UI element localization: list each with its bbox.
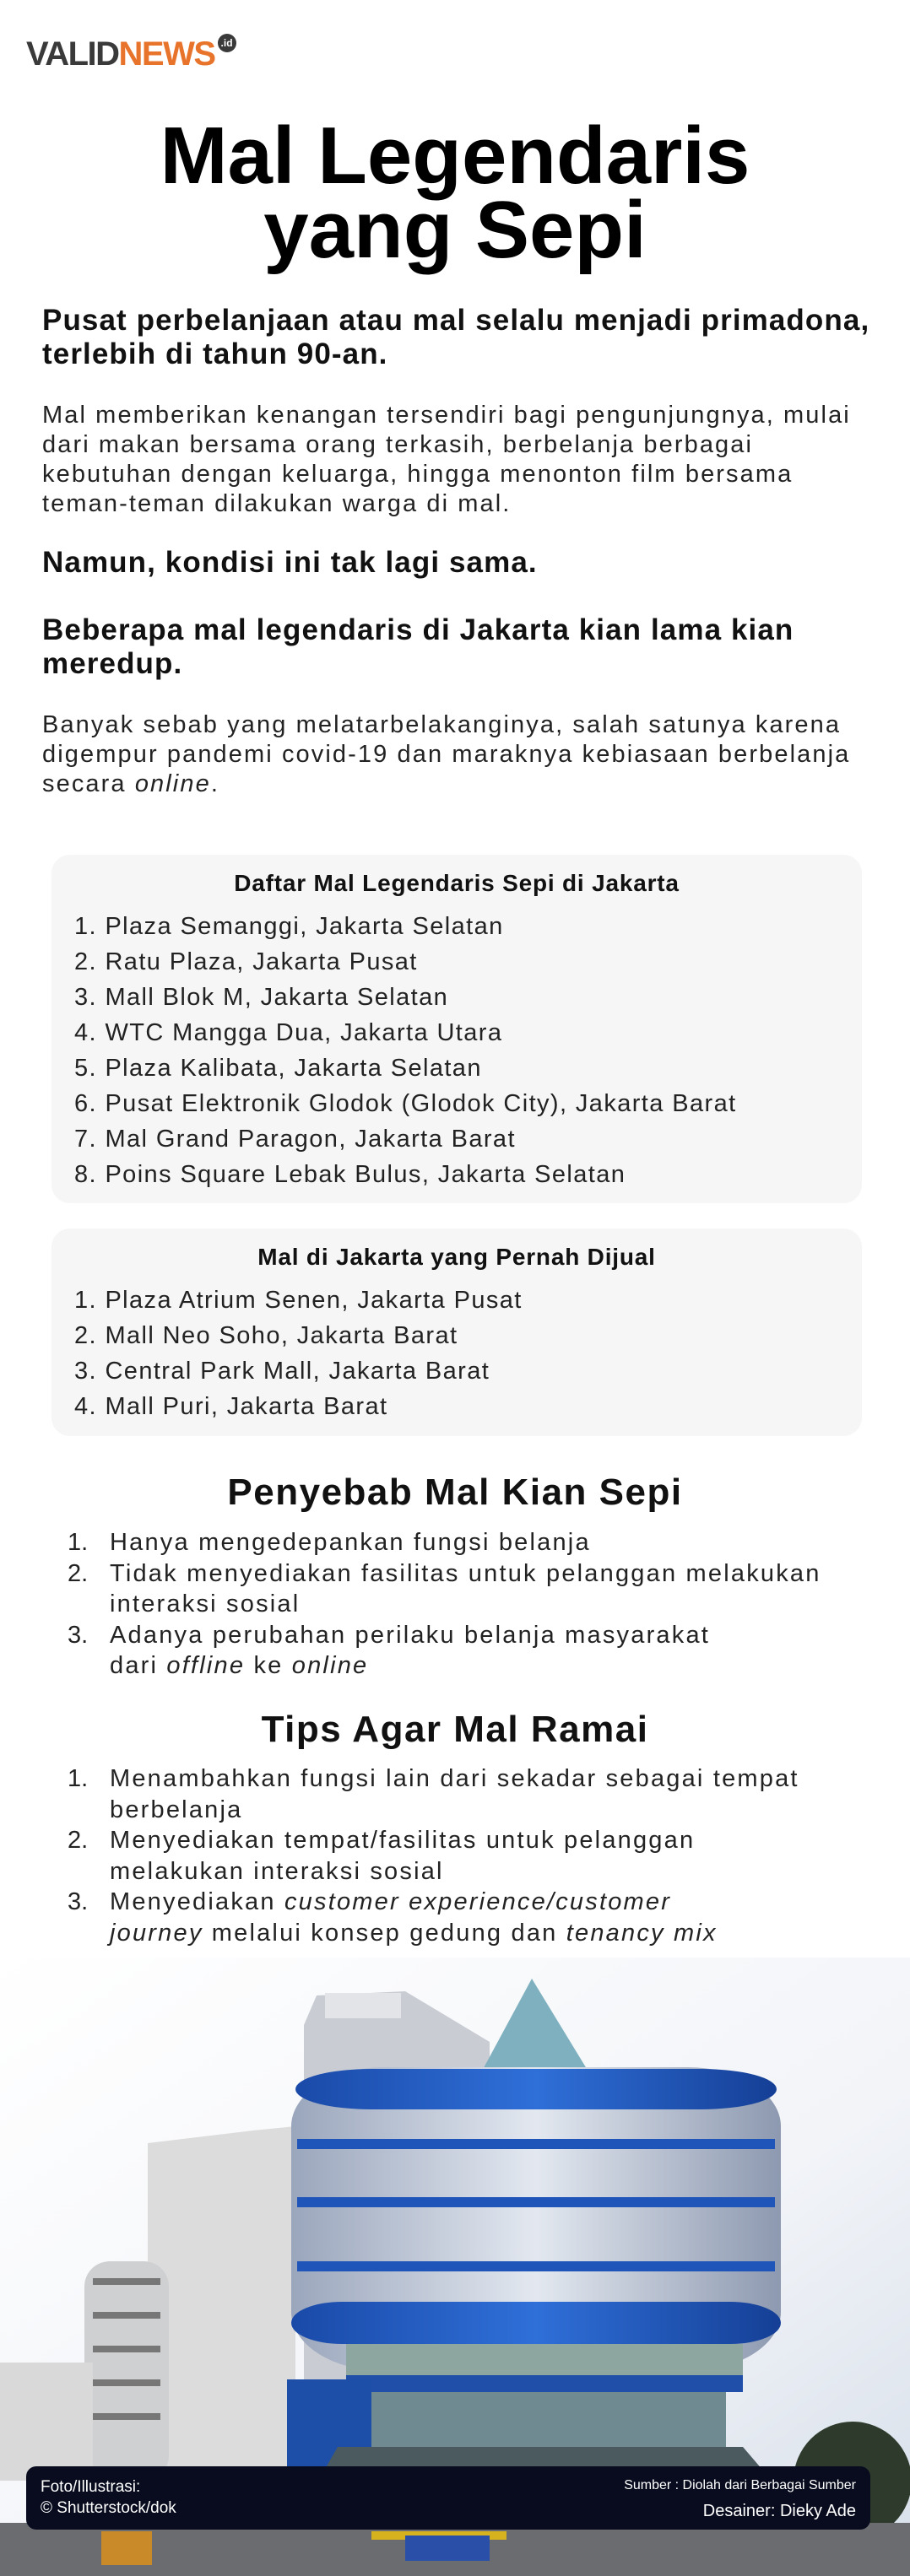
photo: mall building	[0, 1958, 910, 2576]
credit	[41, 2478, 176, 2517]
list: penyebab: interaksi sosial	[110, 1590, 300, 1617]
cone	[479, 1979, 591, 2076]
lead text: Pusat perbelanjaan atau mal selalu menjadi primadona,	[42, 304, 869, 337]
list: tips: 2.	[68, 1827, 88, 1854]
list: tips: 1.	[68, 1765, 88, 1792]
list: 2. Ratu Plaza, Jakarta Pusat	[74, 948, 418, 975]
list: tips: Menyediakan customer experience/customer	[110, 1888, 671, 1915]
title: yang Sepi	[263, 185, 647, 275]
heading: tips: Tips Agar Mal Ramai	[262, 1709, 648, 1750]
panel: daftar mal sepi	[51, 855, 862, 1203]
credit: © Shutterstock/dok	[41, 2499, 176, 2517]
list: 1. Plaza Atrium Senen, Jakarta Pusat	[74, 1287, 523, 1314]
list: 4. Mall Puri, Jakarta Barat	[74, 1393, 387, 1420]
title: Mal Legendaris	[160, 111, 750, 201]
list: 2. Mall Neo Soho, Jakarta Barat	[74, 1322, 458, 1349]
list: penyebab	[68, 1529, 821, 1679]
list: penyebab: 1.	[68, 1529, 88, 1556]
lead text: terlebih di tahun 90-an.	[42, 338, 388, 370]
list: tips: 3.	[68, 1888, 88, 1915]
list: penyebab: Hanya mengedepankan fungsi belanja	[110, 1529, 591, 1556]
paragraph 1: teman-teman dilakukan warga di mal.	[42, 490, 511, 517]
list: 7. Mal Grand Paragon, Jakarta Barat	[74, 1126, 516, 1153]
paragraph 1: Mal memberikan kenangan tersendiri bagi pengunjungnya, mulai	[42, 402, 851, 429]
footer bar	[26, 2466, 870, 2530]
list	[74, 1287, 523, 1420]
list: tips: berbelanja	[110, 1796, 242, 1823]
list: penyebab: Tidak menyediakan fasilitas untuk pelanggan melakukan	[110, 1559, 821, 1586]
list: 1. Plaza Semanggi, Jakarta Selatan	[74, 913, 504, 940]
panel: mal dijual	[51, 1229, 862, 1436]
panel title: Daftar Mal Legendaris Sepi di Jakarta	[234, 870, 680, 896]
list: penyebab: Adanya perubahan perilaku belanja masyarakat	[110, 1622, 710, 1649]
credit: Foto/Illustrasi:	[41, 2478, 140, 2496]
list: 4. WTC Mangga Dua, Jakarta Utara	[74, 1019, 502, 1046]
statement 2: Beberapa mal legendaris di Jakarta kian lama kian	[42, 613, 794, 646]
list: tips: Menyediakan tempat/fasilitas untuk pelanggan	[110, 1827, 695, 1854]
list: 5. Plaza Kalibata, Jakarta Selatan	[74, 1055, 482, 1082]
round building	[291, 2067, 781, 2371]
list: 6. Pusat Elektronik Glodok (Glodok City), Jakarta Barat	[74, 1090, 737, 1117]
paragraph 2: Banyak sebab yang melatarbelakanginya, salah satunya karena	[42, 711, 841, 738]
list: 3. Mall Blok M, Jakarta Selatan	[74, 984, 448, 1011]
paragraph 2: digempur pandemi covid-19 dan maraknya kebiasaan berbelanja	[42, 741, 850, 768]
title	[160, 111, 750, 275]
paragraph 1: kebutuhan dengan keluarga, hingga menonton film bersama	[42, 461, 793, 488]
statement: Namun, kondisi ini tak lagi sama.	[42, 546, 538, 579]
list: penyebab: 2.	[68, 1559, 88, 1586]
list	[74, 913, 737, 1188]
paragraph 1: dari makan bersama orang terkasih, berbelanja berbagai	[42, 431, 753, 458]
list: 8. Poins Square Lebak Bulus, Jakarta Selatan	[74, 1161, 626, 1188]
statement 2	[42, 613, 794, 680]
logo: .id	[221, 37, 233, 49]
heading: penyebab: Penyebab Mal Kian Sepi	[227, 1472, 683, 1513]
list: tips: journey melalui konsep gedung dan tenancy mix	[110, 1919, 718, 1946]
panel title: Mal di Jakarta yang Pernah Dijual	[257, 1244, 656, 1270]
paragraph 1	[42, 402, 851, 517]
source: Sumber : Diolah dari Berbagai Sumber	[624, 2478, 856, 2492]
ground	[0, 2523, 910, 2576]
tower	[304, 1991, 490, 2481]
list: tips	[68, 1765, 799, 1946]
list: 3. Central Park Mall, Jakarta Barat	[74, 1358, 490, 1385]
lead text	[42, 304, 869, 370]
list: penyebab: 3.	[68, 1622, 88, 1649]
list: penyebab: dari offline ke online	[110, 1652, 368, 1679]
list: tips: Menambahkan fungsi lain dari sekadar sebagai tempat	[110, 1765, 799, 1792]
paragraph 2	[42, 711, 850, 797]
statement 2: meredup.	[42, 647, 182, 680]
logo: VALIDNEWS	[26, 35, 215, 73]
list: tips: melakukan interaksi sosial	[110, 1858, 444, 1885]
trees	[794, 2422, 910, 2540]
left building	[148, 2126, 295, 2481]
designer: Desainer: Dieky Ade	[703, 2502, 856, 2520]
paragraph 2: secara online.	[42, 770, 219, 797]
